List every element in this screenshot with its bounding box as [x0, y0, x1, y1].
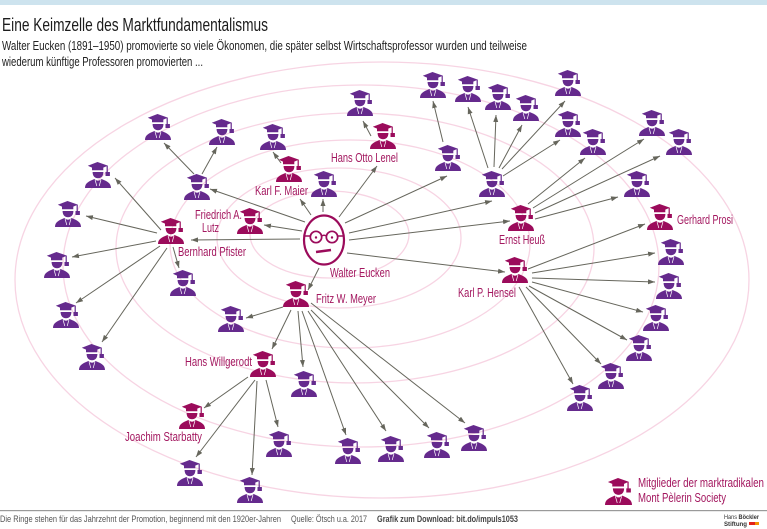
name labels: Hans Otto Lenel: [331, 151, 398, 165]
logo: Hans Böckler Stiftung: Stiftung: [724, 521, 747, 528]
subtitle: wiederum künftige Professoren promovierten ...: [1, 55, 203, 69]
name labels: Ernst Heuß: [499, 233, 545, 247]
name labels: Friedrich A.: [195, 208, 242, 222]
icon: Walter Eucken face: [304, 216, 344, 264]
name labels: Walter Eucken: [330, 266, 390, 280]
name labels: [125, 151, 733, 444]
name labels: Lutz: [202, 221, 219, 235]
footer note: Die Ringe stehen für das Jahrzehnt der Promotion, beginnend mit den 1920er-Jahren: [0, 514, 281, 525]
logo: Hans Böckler Stiftung: [724, 514, 759, 528]
download note: Grafik zum Download: bit.do/impuls1053: [377, 514, 518, 525]
name labels: Fritz W. Meyer: [316, 292, 376, 306]
subtitle: [1, 39, 527, 69]
name labels: Gerhard Prosi: [677, 213, 733, 227]
top colour band: [0, 0, 767, 5]
subtitle: Walter Eucken (1891–1950) promovierte so viele Ökonomen, die später selbst Wirtschaftsprofessor wurden und teilweise: [2, 39, 527, 53]
source: Quelle: Ötsch u.a. 2017: [291, 514, 367, 525]
name labels: Hans Willgerodt: [185, 355, 252, 369]
legend: [605, 476, 764, 505]
arrows of the promotion network: [72, 101, 660, 475]
name labels: Joachim Starbatty: [125, 430, 203, 444]
title: Eine Keimzelle des Marktfundamentalismus: [2, 15, 268, 35]
decade rings: [15, 62, 749, 498]
logo: Hans Böckler Stiftung: Hans Böckler: [724, 514, 759, 521]
purple icons: later professors: [44, 70, 692, 503]
footer rule: [0, 510, 767, 511]
name labels: Bernhard Pfister: [178, 245, 246, 259]
name labels: Karl F. Maier: [255, 184, 308, 198]
legend: Mont Pèlerin Society: [638, 491, 727, 505]
name labels: Karl P. Hensel: [458, 286, 516, 300]
maroon icons: Mont Pèlerin Society members: [158, 123, 673, 429]
